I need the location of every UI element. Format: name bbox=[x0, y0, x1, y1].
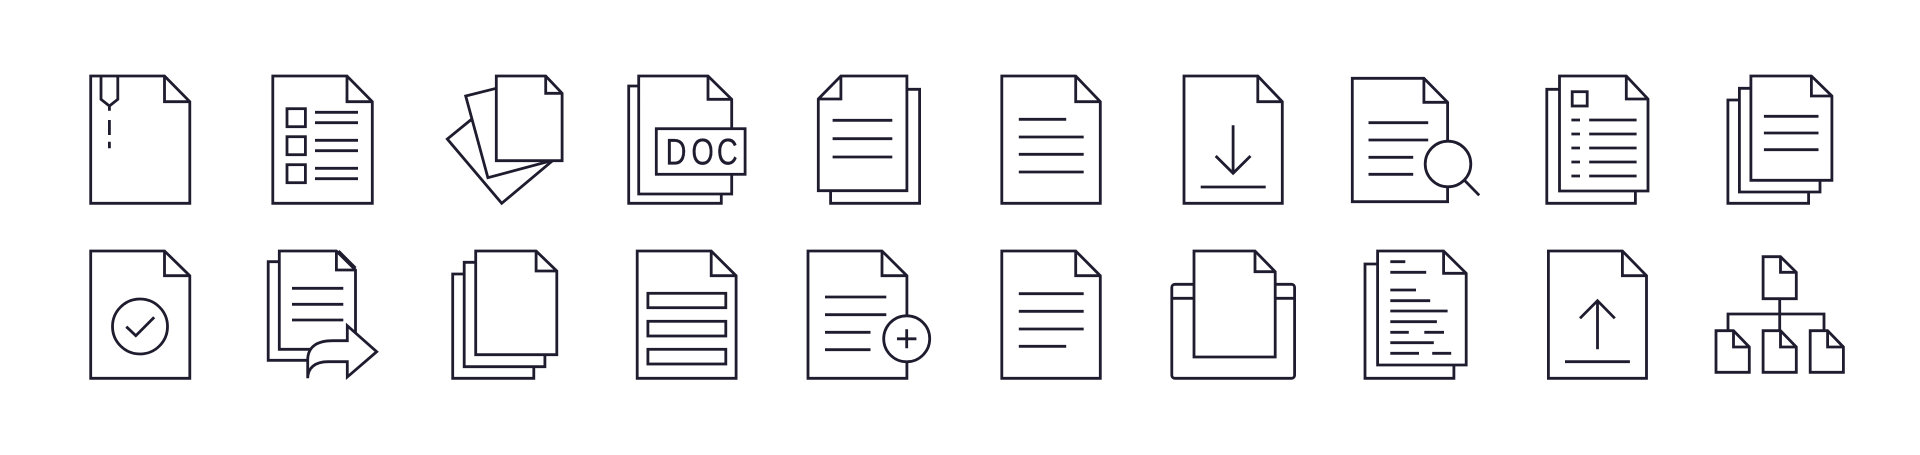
icon: download document bbox=[1184, 76, 1282, 203]
icon: document with bookmark bbox=[91, 76, 190, 203]
icon: document hierarchy bbox=[1716, 257, 1843, 372]
icon: share document bbox=[268, 251, 377, 378]
icon: text document, short last line bbox=[1002, 251, 1100, 378]
icon: blank stacked documents bbox=[453, 251, 557, 378]
icon: document list with image bbox=[1547, 76, 1648, 203]
DOC label: DOC bbox=[666, 132, 738, 173]
icon: DOC file bbox=[629, 76, 745, 203]
icon: fanned sheets bbox=[447, 76, 562, 203]
icon: document in tray bbox=[1172, 251, 1295, 378]
icon: add document bbox=[808, 251, 930, 378]
icon: text document bbox=[1002, 76, 1100, 203]
icon: stacked text documents bbox=[1728, 76, 1832, 203]
icon: two pages, left fold bbox=[818, 76, 920, 203]
icon: document checklist bbox=[273, 76, 372, 203]
icon: code document bbox=[1365, 251, 1466, 378]
icon: upload document bbox=[1548, 251, 1646, 378]
icon: approved document bbox=[91, 251, 190, 378]
icon: document with form fields bbox=[637, 251, 736, 378]
icon: search document bbox=[1352, 78, 1479, 202]
